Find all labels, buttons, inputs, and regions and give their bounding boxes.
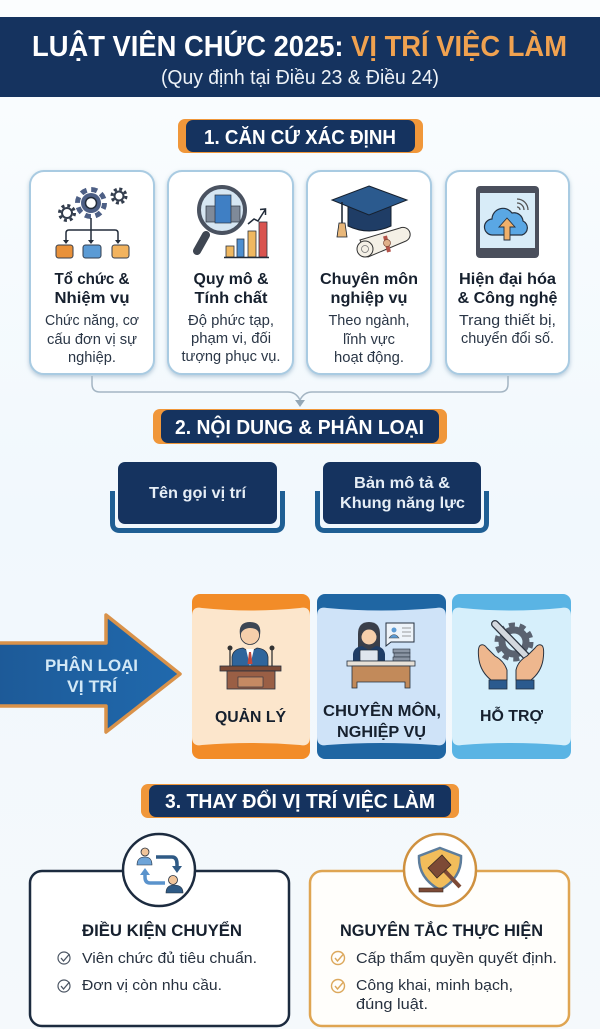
panel: hien dai hoa cong nghe: Trang thiết bị, bbox=[459, 313, 556, 329]
panel: quy mo tinh chat: Tính chất bbox=[194, 290, 268, 307]
panel: chuyen mon nghiep vu: nghiệp vụ bbox=[330, 290, 408, 307]
panel: ho tro: HỖ TRỢ bbox=[480, 706, 543, 725]
panel: hien dai hoa cong nghe: & Công nghệ bbox=[458, 290, 558, 307]
panel: hien dai hoa cong nghe bbox=[446, 171, 569, 374]
arrow: phan loai vi tri bbox=[0, 615, 180, 732]
panel: hien dai hoa cong nghe: chuyển đổi số. bbox=[461, 331, 554, 347]
panel: to chuc nhiem vu bbox=[30, 171, 154, 374]
panel: chuyen mon nghiep vu: CHUYÊN MÔN, bbox=[323, 701, 441, 720]
box: ten goi vi tri: Tên gọi vị trí bbox=[149, 485, 247, 502]
panel: to chuc nhiem vu: cấu đơn vị sự bbox=[47, 332, 137, 348]
checklist item: Cấp thẩm quyền quyết định. bbox=[356, 950, 557, 967]
section heading 2 bbox=[153, 409, 447, 444]
card heading: Tổ chức & bbox=[54, 270, 130, 288]
panel: to chuc nhiem vu: nghiệp. bbox=[68, 350, 116, 366]
subtitle: (Quy định tại Điều 23 & Điều 24) bbox=[161, 67, 439, 89]
panel: dieu kien chuyen: ĐIỀU KIỆN CHUYỂN bbox=[82, 921, 242, 940]
card heading: Hiện đại hóa bbox=[459, 271, 556, 288]
section heading 3: 3. THAY ĐỔI VỊ TRÍ VIỆC LÀM bbox=[165, 789, 435, 813]
panel: ho tro bbox=[452, 594, 571, 759]
icon: graduation cap and diploma bbox=[332, 186, 410, 257]
panel: quy mo tinh chat: Độ phức tạp, bbox=[188, 313, 274, 329]
arrow: phan loai vi tri: PHÂN LOẠI bbox=[45, 656, 138, 675]
panel: chuyen mon nghiep vu: NGHIỆP VỤ bbox=[337, 722, 426, 741]
box: ban mo ta khung nang luc bbox=[318, 462, 486, 530]
panel: chuyen mon nghiep vu: Theo ngành, bbox=[328, 313, 410, 329]
checklist item: Viên chức đủ tiêu chuẩn. bbox=[82, 950, 257, 967]
section heading 2: 2. NỘI DUNG & PHÂN LOẠI bbox=[175, 415, 424, 439]
panel: chuyen mon nghiep vu: lĩnh vực bbox=[343, 332, 395, 348]
card heading: Chuyên môn bbox=[320, 271, 418, 288]
checklist item: Công khai, minh bạch, bbox=[356, 977, 513, 994]
panel: nguyen tac thuc hien: NGUYÊN TẮC THỰC HIỆN bbox=[340, 921, 543, 940]
checklist item: đúng luật. bbox=[356, 996, 428, 1013]
panel: nguyen tac thuc hien bbox=[310, 834, 569, 1026]
icon: tablet with cloud upload bbox=[476, 186, 539, 258]
box: ten goi vi tri bbox=[112, 462, 282, 530]
panel: quan ly: QUẢN LÝ bbox=[215, 707, 286, 726]
panel: to chuc nhiem vu: Nhiệm vụ bbox=[54, 290, 130, 307]
checklist item: Đơn vị còn nhu cầu. bbox=[82, 977, 222, 994]
panel: quy mo tinh chat: tượng phục vụ. bbox=[182, 349, 280, 365]
panel: chuyen mon nghiep vu bbox=[317, 594, 446, 759]
title: LUẬT VIÊN CHỨC 2025: VỊ TRÍ VIỆC LÀM bbox=[32, 29, 567, 63]
section heading 1 bbox=[178, 119, 423, 153]
icon: people swap bbox=[123, 834, 195, 906]
panel: chuyen mon nghiep vu: hoạt động. bbox=[334, 350, 404, 366]
box: ban mo ta khung nang luc: Khung năng lực bbox=[340, 495, 465, 512]
checklist item bbox=[332, 977, 513, 1013]
section heading 3 bbox=[141, 784, 459, 818]
header banner bbox=[0, 17, 600, 97]
arrow: phan loai vi tri: VỊ TRÍ bbox=[67, 677, 118, 696]
panel: quy mo tinh chat: phạm vi, đối bbox=[191, 331, 271, 347]
icon: magnifier and bars bbox=[197, 187, 269, 258]
icon: hands with gear and wrench bbox=[478, 624, 544, 689]
panel: quan ly bbox=[192, 594, 310, 759]
panel: to chuc nhiem vu: Chức năng, cơ bbox=[45, 313, 139, 329]
icon: specialist at desk bbox=[347, 622, 415, 688]
icon: speaker at podium bbox=[220, 622, 281, 689]
arrow: bracket connector bbox=[92, 376, 508, 407]
icon: gears and org chart bbox=[56, 189, 129, 258]
panel: dieu kien chuyen bbox=[30, 834, 289, 1026]
box: ban mo ta khung nang luc: Bản mô tả & bbox=[354, 475, 450, 492]
card heading: Quy mô & bbox=[194, 271, 269, 288]
section heading 1: 1. CĂN CỨ XÁC ĐỊNH bbox=[204, 125, 396, 149]
panel: chuyen mon nghiep vu bbox=[307, 171, 431, 374]
icon: shield with gavel bbox=[404, 834, 476, 906]
panel: quy mo tinh chat bbox=[168, 171, 293, 374]
